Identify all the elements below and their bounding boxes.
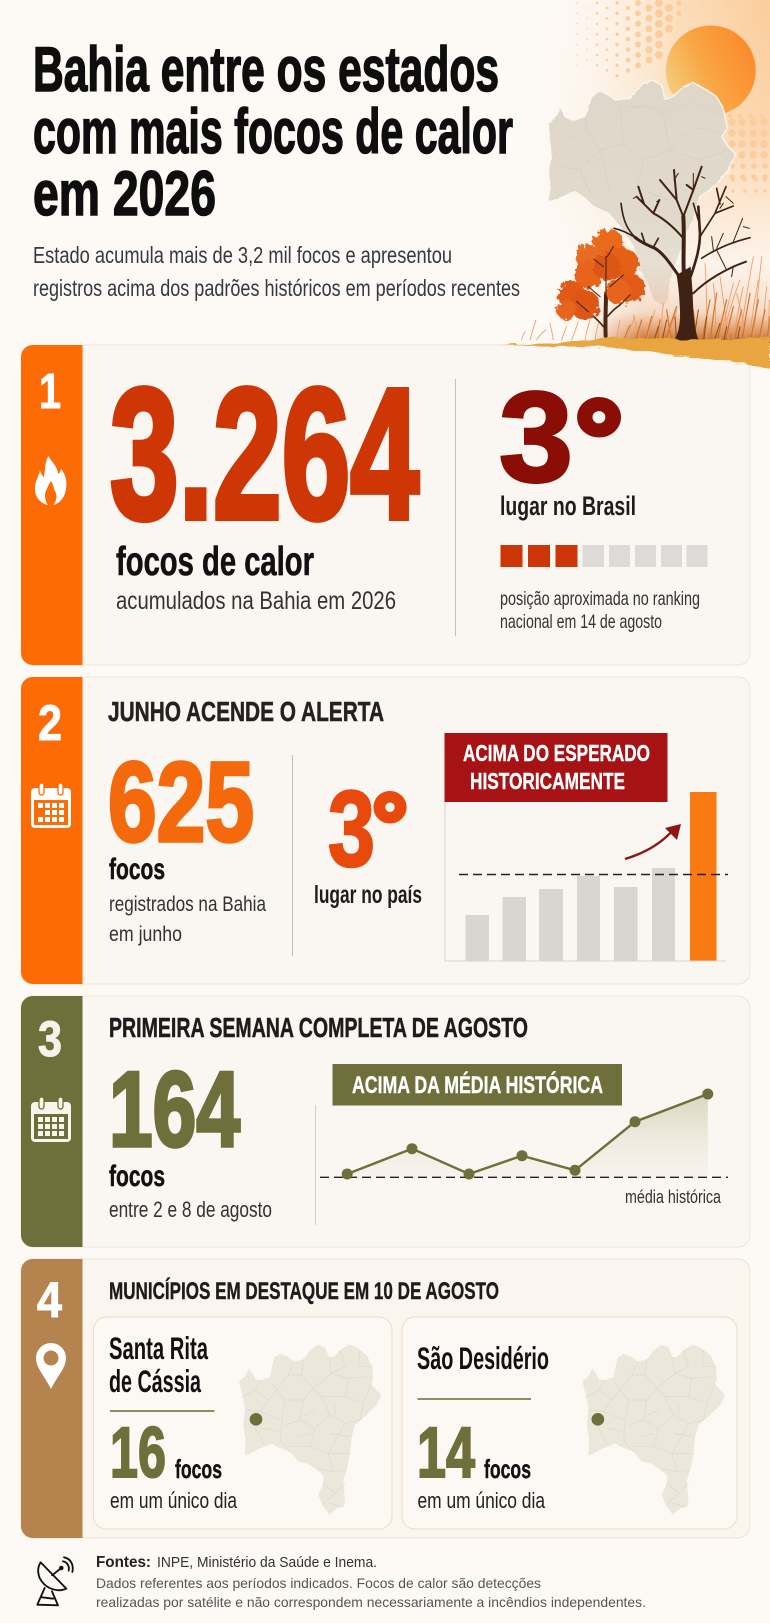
- subtitle: [33, 242, 520, 301]
- bare tree: [614, 167, 750, 345]
- footer sources: INPE, Ministério da Saúde e Inema.: [157, 1554, 377, 1571]
- map: [239, 1345, 382, 1515]
- icon: pin: [36, 1343, 66, 1389]
- number 1: 1: [39, 365, 61, 419]
- icon: calendar: [31, 1097, 71, 1142]
- Bahia map silhouette: [548, 80, 736, 307]
- icon: satellite dish: [37, 1557, 73, 1605]
- rank 3rd: [499, 366, 623, 509]
- caption: em um único dia: [418, 1488, 545, 1513]
- subtitle: registros acima dos padrões históricos em períodos recentes: [33, 275, 520, 301]
- label registrados: [109, 892, 266, 946]
- number 4: 4: [37, 1272, 62, 1328]
- label focos: focos: [109, 1160, 165, 1193]
- orange tree: [557, 229, 646, 336]
- label acumulados: acumulados na Bahia em 2026: [116, 587, 396, 615]
- caption: em um único dia: [110, 1488, 237, 1513]
- title: com mais focos de calor: [33, 97, 513, 167]
- panel 1: acumulado: [21, 345, 750, 665]
- icon: calendar: [31, 783, 71, 828]
- ranking caption: nacional em 14 de agosto: [500, 611, 662, 633]
- ranking squares: [500, 545, 708, 567]
- label focos: focos: [109, 853, 165, 886]
- subtitle: Estado acumula mais de 3,2 mil focos e apresentou: [33, 242, 452, 268]
- footer sources: Fontes:: [96, 1554, 151, 1571]
- footer sources: Dados referentes aos períodos indicados. Focos de calor são detecções: [96, 1575, 541, 1591]
- label registrados: em junho: [109, 922, 182, 946]
- line chart: [320, 1088, 728, 1180]
- sun: [666, 26, 756, 116]
- number 3: 3: [38, 1011, 62, 1067]
- count 14: 14: [417, 1414, 475, 1493]
- sidebar: [21, 1259, 82, 1538]
- rank 3rd: °: [575, 377, 623, 502]
- bar chart: [445, 792, 728, 961]
- big number 164: 164: [109, 1049, 240, 1169]
- card: [21, 996, 750, 1247]
- municipality name: Santa Rita: [109, 1330, 208, 1366]
- label focos de calor: focos de calor: [116, 538, 314, 584]
- sidebar: [21, 345, 82, 665]
- arrow: [625, 824, 681, 859]
- banner: acima da media: [332, 1064, 622, 1106]
- label focos: focos: [484, 1454, 531, 1484]
- label focos: focos: [175, 1454, 222, 1484]
- icon: flame: [35, 456, 66, 505]
- label lugar no Brasil: lugar no Brasil: [500, 491, 636, 521]
- heading: PRIMEIRA SEMANA COMPLETA DE AGOSTO: [109, 1012, 528, 1043]
- municipality name: de Cássia: [109, 1363, 201, 1399]
- sidebar: [21, 996, 82, 1247]
- municipality name: [109, 1330, 208, 1399]
- big number 625: 625: [108, 739, 254, 865]
- divider: [292, 755, 293, 956]
- ground: [500, 337, 770, 368]
- panel 4: municipios: [21, 1259, 750, 1538]
- label registrados: registrados na Bahia: [109, 892, 266, 916]
- label media historica: média histórica: [625, 1186, 722, 1207]
- card: Sao Desiderio: [402, 1317, 737, 1529]
- panel 2: junho: [21, 677, 750, 984]
- card: [21, 345, 750, 665]
- count 16: 16: [110, 1414, 166, 1493]
- municipality name: São Desidério: [417, 1340, 549, 1376]
- footer sources: realizadas por satélite e não correspondem necessariamente a incêndios independentes.: [96, 1594, 646, 1610]
- callout: acima do esperado: HISTORICAMENTE: [470, 768, 625, 794]
- footer sources: [96, 1554, 646, 1610]
- hero illustration: [522, 0, 770, 345]
- ranking caption: [500, 588, 700, 633]
- sidebar: [21, 677, 82, 984]
- divider: [455, 379, 456, 636]
- rank 3rd: 3: [328, 768, 375, 889]
- halftone dots: [577, 3, 765, 196]
- number 2: 2: [38, 695, 62, 751]
- callout: acima do esperado: [444, 733, 668, 802]
- card: [21, 677, 750, 984]
- map: [582, 1345, 725, 1515]
- callout: acima do esperado: ACIMA DO ESPERADO: [463, 740, 650, 766]
- ranking caption: posição aproximada no ranking: [500, 588, 700, 610]
- big number: 3.264: [110, 351, 419, 558]
- label lugar no país: lugar no país: [314, 881, 422, 909]
- title: Bahia entre os estados: [33, 35, 499, 105]
- rank 3rd: 3: [499, 366, 573, 509]
- rank 3rd: °: [372, 776, 408, 876]
- peach corner wash: [540, 0, 770, 290]
- heading: JUNHO ACENDE O ALERTA: [108, 696, 384, 727]
- banner: acima da media: ACIMA DA MÉDIA HISTÓRICA: [352, 1071, 603, 1099]
- title: em 2026: [33, 159, 216, 229]
- card: [21, 1259, 750, 1538]
- heading: MUNICÍPIOS EM DESTAQUE EM 10 DE AGOSTO: [109, 1277, 499, 1305]
- label dates: entre 2 e 8 de agosto: [109, 1197, 272, 1222]
- panel 3: agosto: [21, 996, 750, 1247]
- grass: [522, 257, 770, 345]
- title: [33, 35, 513, 229]
- card: Santa Rita de Cassia: [94, 1317, 392, 1529]
- divider: [315, 1105, 316, 1225]
